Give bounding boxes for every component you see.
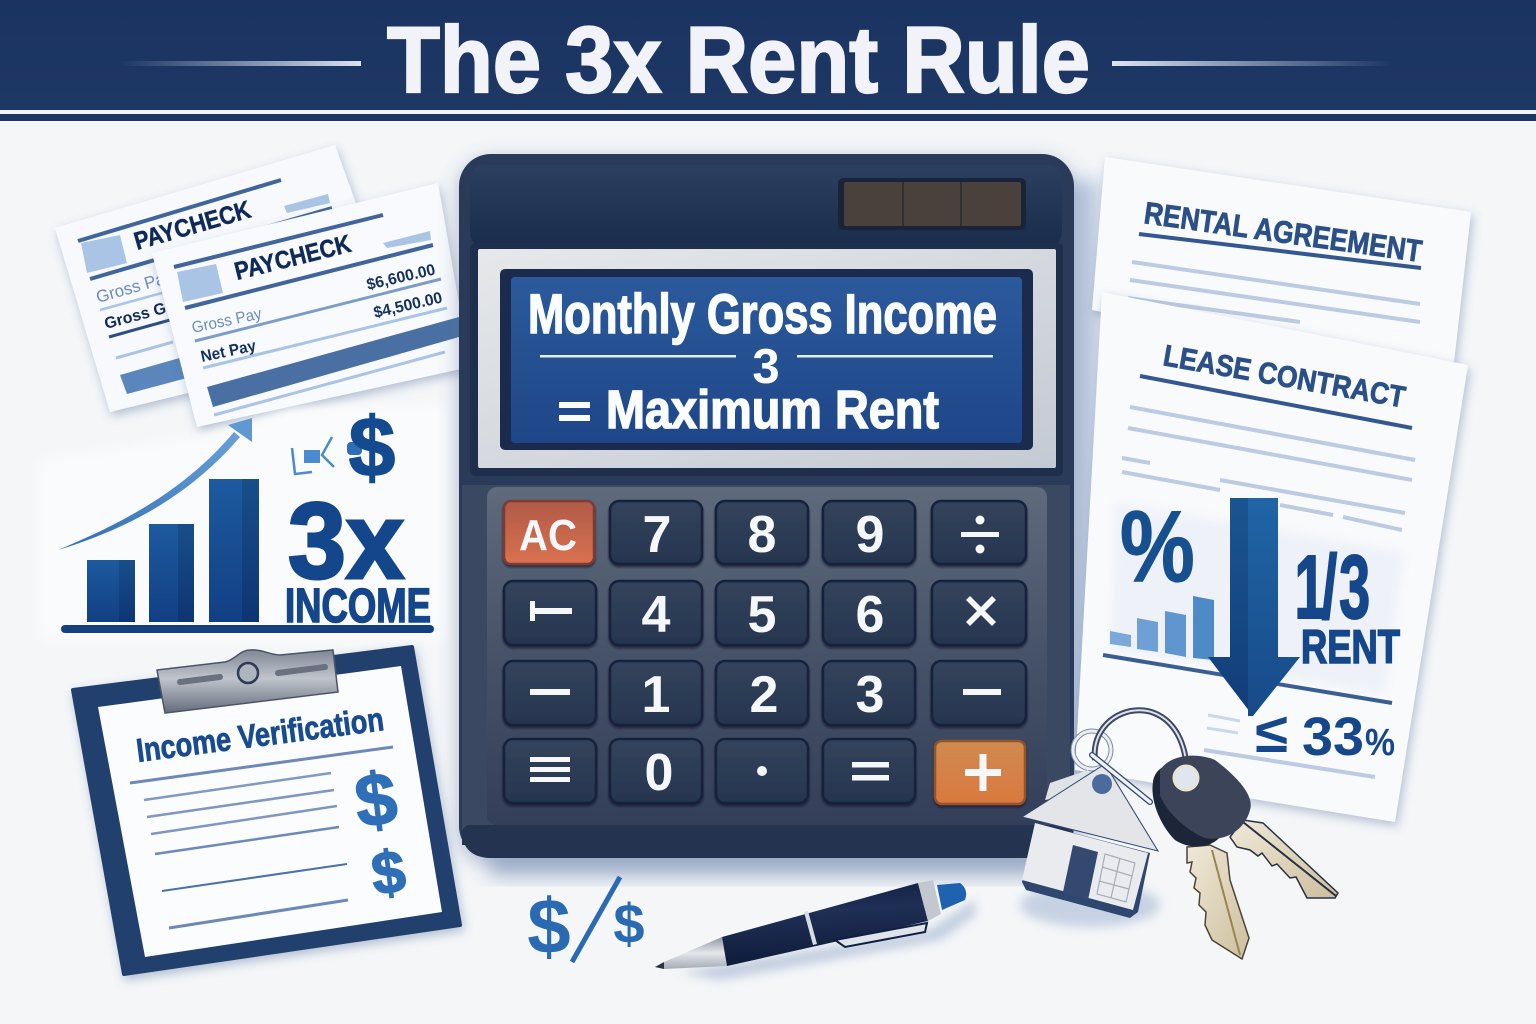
keys row 2 bbox=[504, 581, 1026, 645]
small ring bbox=[1073, 731, 1111, 769]
dollar signs: $ bbox=[350, 756, 401, 843]
keys row 4 bbox=[504, 739, 1025, 804]
key labels: 3 bbox=[856, 666, 884, 724]
one third label: 1/3 bbox=[1295, 536, 1370, 637]
income growth chart bbox=[40, 400, 445, 640]
key labels: 6 bbox=[856, 586, 884, 644]
clipboard: income verification bbox=[73, 647, 460, 974]
key labels: 2 bbox=[750, 666, 778, 724]
formula numerator: Monthly Gross Income bbox=[528, 282, 997, 345]
display: Maximum Rent bbox=[606, 380, 939, 440]
small chart icon bbox=[292, 437, 362, 474]
house tag bbox=[1022, 755, 1158, 918]
lower key bbox=[1187, 845, 1249, 959]
key labels: AC bbox=[519, 511, 577, 560]
dollar split symbol: $ bbox=[527, 882, 571, 970]
lease contract document: LEASE CONTRACT bbox=[1161, 339, 1408, 414]
keys row 1 bbox=[504, 501, 1026, 564]
key head bbox=[1152, 756, 1251, 847]
key labels: 0 bbox=[645, 744, 673, 802]
chart baseline bbox=[61, 625, 434, 633]
at most 33 percent bbox=[1255, 701, 1395, 767]
top housing bbox=[470, 165, 1062, 247]
growth arrow bbox=[58, 418, 252, 550]
clip bbox=[157, 650, 338, 713]
side shadow of calculator bbox=[1066, 180, 1100, 830]
paycheck: back: Gross Pay bbox=[94, 267, 176, 307]
display bbox=[470, 243, 1063, 476]
paycheck: back bbox=[55, 145, 405, 412]
lower shadow of calculator bbox=[490, 850, 1040, 878]
dollar split symbol bbox=[527, 877, 645, 970]
percent sign: % bbox=[1120, 490, 1195, 603]
pen bbox=[655, 880, 975, 980]
dollar signs bbox=[350, 756, 409, 908]
mini bar chart bbox=[1110, 596, 1214, 660]
dollar signs: $ bbox=[368, 837, 409, 908]
key labels: 8 bbox=[748, 506, 776, 564]
key labels: 5 bbox=[748, 586, 776, 644]
formula result bbox=[559, 402, 590, 408]
key labels: 9 bbox=[856, 506, 884, 564]
key labels: 7 bbox=[643, 506, 671, 564]
paycheck: back: PAYCHECK bbox=[131, 196, 254, 256]
down arrow bbox=[1208, 498, 1300, 716]
dollar sign: $ bbox=[349, 400, 395, 494]
paycheck: front: Gross Pay bbox=[190, 306, 263, 337]
title banner bbox=[0, 0, 1536, 121]
rent ratio panel bbox=[1103, 490, 1405, 777]
lease contract document bbox=[1075, 292, 1468, 822]
paycheck: front: $6,600.00 bbox=[365, 262, 437, 294]
paycheck: front: PAYCHECK bbox=[232, 230, 354, 286]
rental agreement document: RENTAL AGREEMENT bbox=[1142, 195, 1424, 269]
calculator bbox=[459, 154, 1074, 858]
at most 33 percent: 33 bbox=[1302, 707, 1364, 767]
rental agreement document bbox=[1092, 157, 1471, 380]
paycheck: front bbox=[152, 183, 470, 427]
bars bbox=[87, 479, 259, 622]
dollar split symbol: $ bbox=[613, 892, 645, 955]
paycheck: back: Gross Gross bbox=[103, 291, 201, 333]
key labels: 1 bbox=[642, 666, 670, 724]
house keychain with keys bbox=[1020, 710, 1338, 959]
income label: INCOME bbox=[285, 580, 431, 633]
keypad bbox=[462, 485, 1070, 858]
paycheck: front: $4,500.00 bbox=[372, 290, 444, 322]
rent label: RENT bbox=[1301, 620, 1400, 673]
key labels: 4 bbox=[642, 586, 671, 644]
title: The 3x Rent Rule bbox=[387, 7, 1090, 112]
right key bbox=[1230, 820, 1338, 898]
solar panel bbox=[838, 178, 1026, 230]
key ring bbox=[1095, 710, 1187, 782]
keys row 3 bbox=[504, 661, 1026, 725]
key labels bbox=[519, 506, 1001, 802]
at most 33 percent: % bbox=[1365, 722, 1395, 764]
paycheck: front: Net Pay bbox=[199, 338, 258, 366]
formula divisor: 3 bbox=[752, 340, 780, 394]
3x label: 3x bbox=[288, 480, 404, 601]
at most 33 percent: ≤ bbox=[1255, 701, 1288, 764]
clipboard heading: Income Verification bbox=[134, 700, 386, 769]
